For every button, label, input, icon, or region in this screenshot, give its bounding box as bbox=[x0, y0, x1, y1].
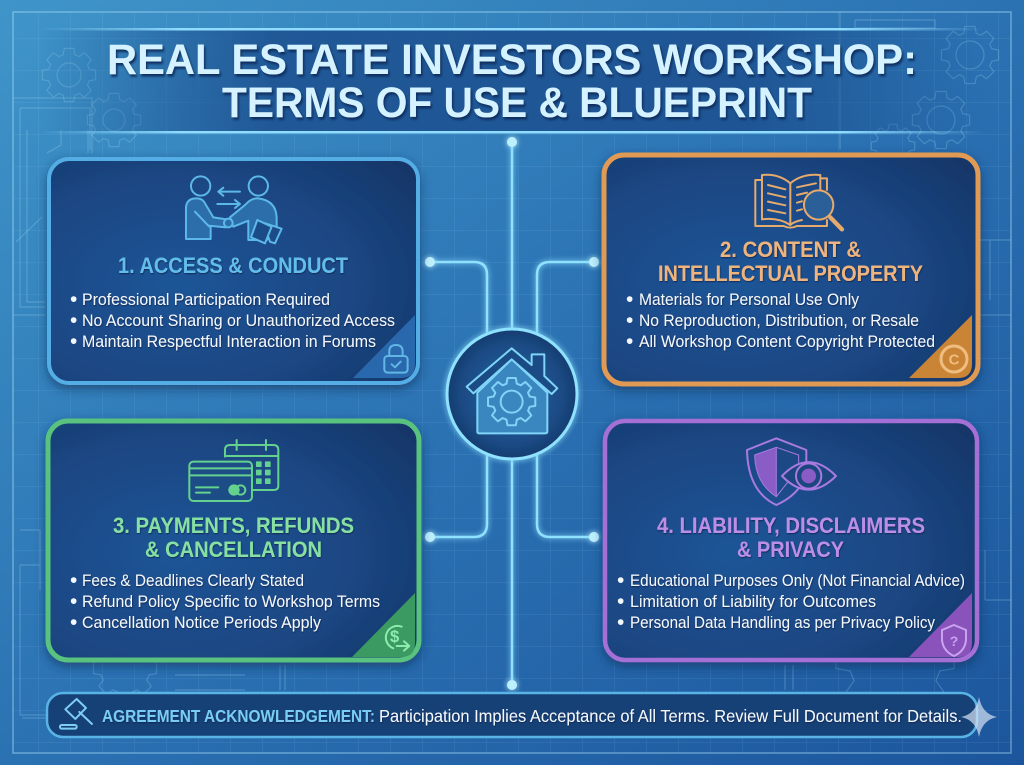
bullet list: Fees & Deadlines Clearly Stated bbox=[82, 572, 304, 590]
icon: gavel bbox=[60, 699, 92, 729]
heading: 2. CONTENT & bbox=[720, 237, 861, 262]
panel: content and intellectual property bbox=[604, 155, 978, 384]
heading: 4. LIABILITY, DISCLAIMERS bbox=[657, 513, 925, 538]
bullet list: No Reproduction, Distribution, or Resale bbox=[639, 312, 919, 330]
heading: & PRIVACY bbox=[737, 537, 844, 562]
icon: lock bbox=[384, 345, 408, 373]
footer bar bbox=[47, 693, 977, 737]
heading: 1. ACCESS & CONDUCT bbox=[118, 253, 349, 278]
icon: question shield: ? bbox=[950, 633, 958, 649]
bullet list: • bbox=[626, 309, 633, 332]
icon: refund dollar: $ bbox=[390, 627, 400, 646]
bullet list: Cancellation Notice Periods Apply bbox=[82, 614, 322, 632]
bullet list: No Account Sharing or Unauthorized Access bbox=[82, 312, 395, 330]
heading bbox=[113, 513, 354, 562]
icon: handshake bbox=[186, 176, 282, 243]
footer text: AGREEMENT ACKNOWLEDGEMENT: bbox=[102, 706, 375, 726]
title: REAL ESTATE INVESTORS WORKSHOP: bbox=[107, 36, 917, 84]
heading: INTELLECTUAL PROPERTY bbox=[658, 261, 923, 286]
bullet list: • bbox=[70, 309, 77, 332]
bullet list: Professional Participation Required bbox=[82, 291, 330, 309]
bullet list: Educational Purposes Only (Not Financial Advice) bbox=[630, 572, 965, 590]
footer text: Participation Implies Acceptance of All Terms. Review Full Document for Details. bbox=[379, 706, 962, 726]
bullet list: All Workshop Content Copyright Protected bbox=[639, 333, 935, 351]
central hub icon bbox=[447, 329, 577, 459]
panel: liability, disclaimers and privacy bbox=[605, 421, 977, 660]
icon: open book and magnifier bbox=[755, 175, 842, 229]
title bbox=[107, 36, 917, 127]
bullet list bbox=[70, 569, 380, 634]
bullet list: • bbox=[70, 611, 77, 634]
bullet list: • bbox=[617, 611, 624, 634]
bullet list: • bbox=[70, 330, 77, 353]
bullet list: • bbox=[70, 288, 77, 311]
panel: payments, refunds and cancellation bbox=[48, 421, 419, 660]
bullet list: • bbox=[70, 590, 77, 613]
sparkle watermark bbox=[961, 697, 997, 737]
icon: copyright: C bbox=[949, 352, 960, 368]
panel: access and conduct bbox=[49, 159, 418, 383]
connector lines bbox=[425, 137, 599, 690]
icon: shield and eye bbox=[747, 438, 836, 505]
title: TERMS OF USE & BLUEPRINT bbox=[222, 79, 812, 127]
bullet list: Limitation of Liability for Outcomes bbox=[630, 593, 876, 611]
footer text bbox=[102, 706, 962, 726]
bullet list: • bbox=[617, 569, 624, 592]
heading: & CANCELLATION bbox=[145, 537, 322, 562]
heading: 3. PAYMENTS, REFUNDS bbox=[113, 513, 354, 538]
bullet list: Materials for Personal Use Only bbox=[639, 291, 860, 309]
bullet list: • bbox=[626, 288, 633, 311]
bullet list: Maintain Respectful Interaction in Forums bbox=[82, 333, 376, 351]
bullet list bbox=[626, 288, 935, 353]
icon: refund dollar bbox=[386, 626, 409, 651]
bullet list bbox=[617, 569, 965, 634]
bullet list: Refund Policy Specific to Workshop Terms bbox=[82, 593, 380, 611]
bullet list: • bbox=[617, 590, 624, 613]
icon: question shield bbox=[942, 625, 966, 656]
bullet list: • bbox=[70, 569, 77, 592]
icon: credit card and calendar bbox=[189, 440, 278, 501]
icon: copyright bbox=[941, 346, 967, 372]
bullet list: Personal Data Handling as per Privacy Policy bbox=[630, 614, 936, 632]
bullet list: • bbox=[626, 330, 633, 353]
heading bbox=[658, 237, 923, 286]
heading bbox=[657, 513, 925, 562]
title band bbox=[40, 28, 984, 134]
bullet list bbox=[70, 288, 395, 353]
